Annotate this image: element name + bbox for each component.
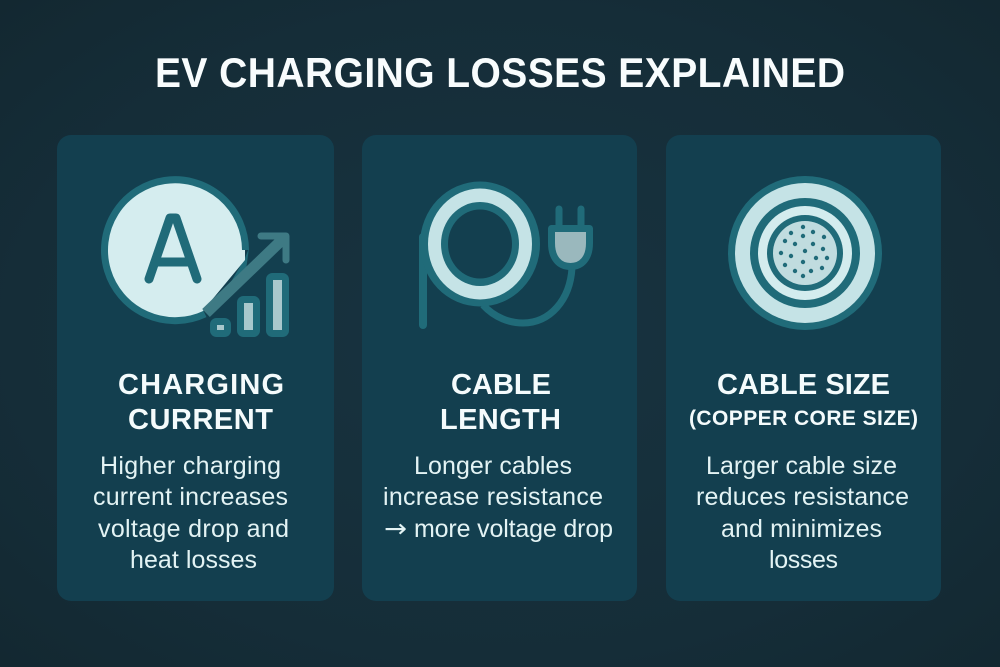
text: charging current description: [93, 452, 289, 574]
heading: charging current: CURRENT: [128, 404, 273, 436]
text: cable size description: Larger cable size: [706, 452, 897, 480]
heading: cable length: LENGTH: [440, 404, 561, 436]
heading: cable length: [440, 369, 561, 436]
heading: cable size: CABLE SIZE: [717, 369, 890, 401]
heading: cable size: [689, 369, 918, 430]
panel: cable length: [362, 135, 637, 601]
text: charging current description: Higher charging: [100, 452, 281, 480]
heading: charging current: CHARGING: [118, 369, 284, 401]
text: cable size description: [696, 452, 909, 574]
heading: cable size: (COPPER CORE SIZE): [689, 407, 918, 430]
text: cable length description: →: [384, 514, 407, 543]
text: charging current description: heat losses: [130, 546, 257, 574]
text: cable length description: increase resistance: [383, 483, 603, 511]
icon: ammeter circle with rising arrow and bars: [105, 180, 286, 334]
copper strands: [779, 225, 829, 278]
heading: cable length: CABLE: [451, 369, 551, 401]
icon: cable cross-section: [728, 176, 882, 330]
text: cable size description: and minimizes: [721, 515, 882, 543]
icon: coiled cable and plug: [420, 182, 590, 325]
text: charging current description: voltage drop and: [98, 515, 289, 543]
heading: charging current: [118, 369, 284, 436]
text: cable length description: Longer cables: [414, 452, 572, 480]
text: cable size description: losses: [769, 546, 838, 574]
text: charging current description: current increases: [93, 483, 288, 511]
title: EV CHARGING LOSSES EXPLAINED: [155, 49, 845, 96]
panel: charging current: [57, 135, 334, 601]
text: cable length description: more voltage drop: [414, 515, 613, 543]
text: cable size description: reduces resistance: [696, 483, 909, 511]
text: cable length description: [383, 452, 613, 543]
panel: cable size: [666, 135, 941, 601]
